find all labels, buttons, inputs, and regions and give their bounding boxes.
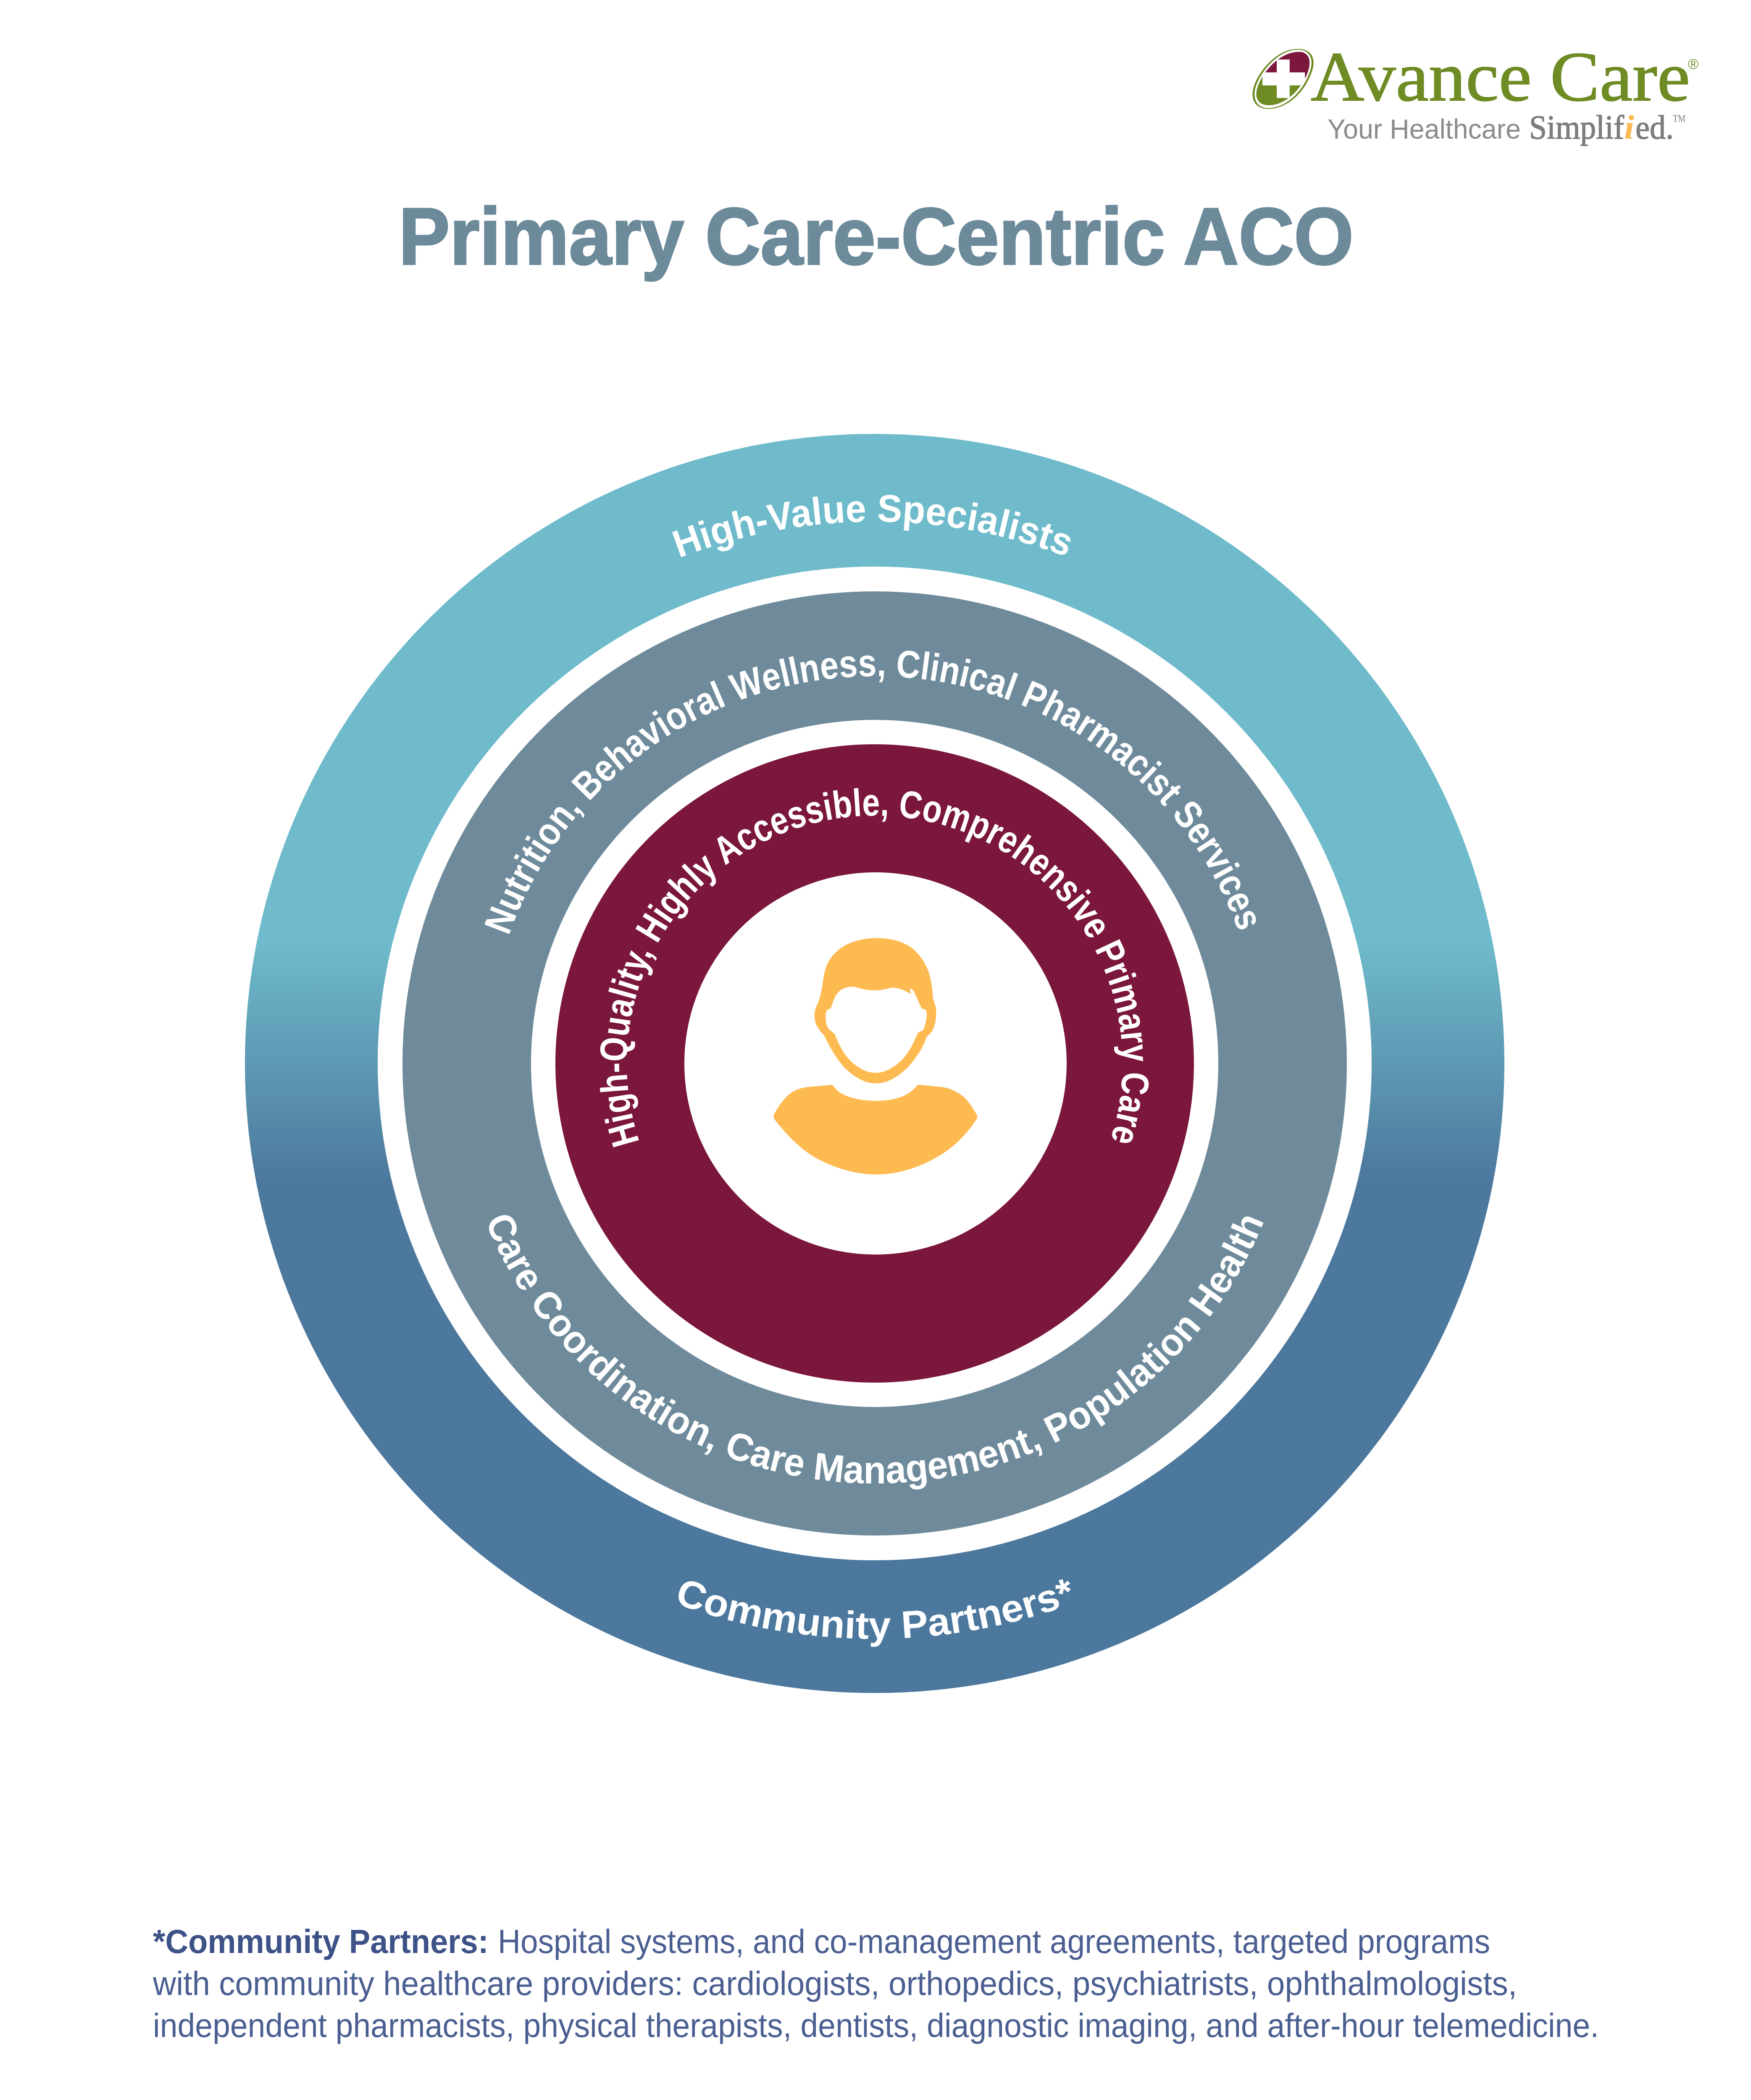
label: Nutrition, Behavioral Wellness, Clinical Pharmacist Services: Nutrition, Behavioral Wellness, Clinical Pharmacist Services [476, 642, 1271, 939]
logo tagline: Simplified: Simplif [1529, 109, 1624, 146]
logo tagline: Simplified: TM [1673, 113, 1685, 124]
footnote: line 2: with community healthcare providers: cardiologists, orthopedics, psychiatrists, ophthalmologists, [152, 1965, 1517, 2002]
white gap [531, 720, 1218, 1407]
footnote: bold label: *Community Partners: [153, 1923, 489, 1960]
logo tagline: Your Healthcare [1328, 113, 1521, 144]
logo tagline: Simplified [1529, 109, 1685, 146]
label: High-Quality, Highly Accessible, Comprehensive Primary Care: High-Quality, Highly Accessible, Comprehensive Primary Care [592, 781, 1157, 1152]
registered mark: ® [1688, 56, 1698, 72]
logo wordmark: Avance Care [1311, 38, 1690, 116]
icon: person [774, 938, 978, 1174]
logo tagline: Simplified: ed. [1635, 109, 1674, 146]
footnote: line 1: Hospital systems, and co-management agreements, targeted programs [498, 1923, 1490, 1960]
label: Community Partners: Community Partners* [671, 1570, 1080, 1647]
white gap [378, 567, 1372, 1560]
concentric ring diagram [245, 434, 1504, 1693]
logo icon: tilted oval with cross [1253, 49, 1314, 109]
logo: Avance Care [1253, 49, 1698, 146]
center circle [684, 872, 1067, 1255]
middle ring: services [402, 591, 1347, 1536]
inner ring: primary care [555, 744, 1194, 1383]
icon: head and hair [815, 938, 936, 1083]
label: High-Value Specialists: High-Value Specialists [667, 487, 1079, 566]
title: Primary Care-Centric ACO [399, 191, 1354, 281]
logo tagline: Simplified: i [1624, 109, 1634, 146]
label: Care Coordination, Care Management, Population Health: Care Coordination, Care Management, Population Health [477, 1207, 1272, 1492]
outer ring: specialists and community partners [245, 434, 1504, 1693]
footnote [152, 1923, 1599, 2044]
icon: shoulders [774, 1085, 978, 1174]
footnote: line 3: independent pharmacists, physical therapists, dentists, diagnostic imaging, and after-hour telemedicine. [153, 2007, 1599, 2044]
